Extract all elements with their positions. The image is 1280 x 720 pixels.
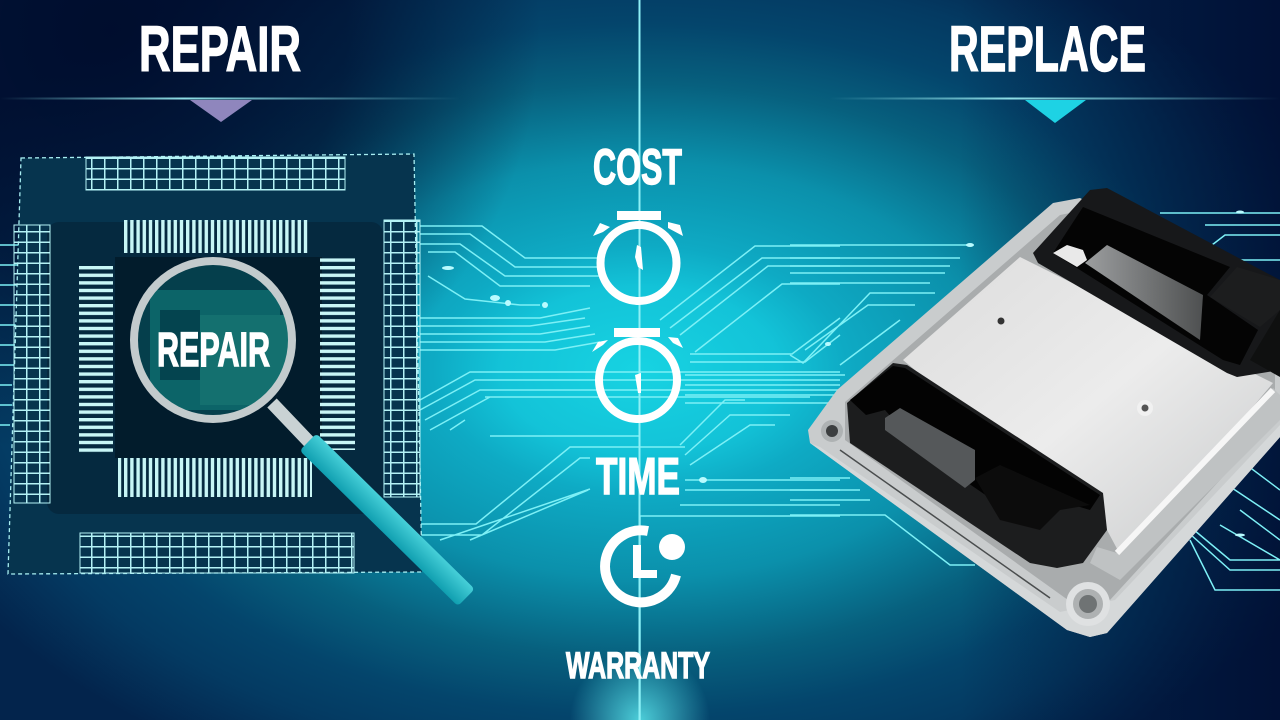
- circuit nodes: [442, 210, 1245, 536]
- connector cells: [885, 408, 975, 488]
- mesh: left: [14, 225, 50, 503]
- header: replace: [830, 13, 1280, 123]
- lower rail: [810, 425, 1280, 637]
- pins: left: [79, 263, 113, 455]
- mesh: bottom: [80, 533, 354, 573]
- lens: [138, 265, 288, 415]
- pins: bottom: [118, 458, 312, 497]
- circuit chip illustration: [8, 154, 422, 574]
- pins: top: [124, 220, 310, 253]
- marker triangle: replace: [1025, 100, 1086, 123]
- handle: blue grip: [300, 433, 475, 606]
- top plate: [903, 257, 1273, 560]
- lens label: REPAIR: [157, 324, 270, 377]
- icon: stopwatch 1: [593, 211, 683, 301]
- metal housing: [808, 198, 1280, 637]
- mounting lug: bottom: [1066, 582, 1110, 626]
- center divider line: [638, 0, 640, 720]
- heading: repair: REPAIR: [139, 13, 301, 85]
- marker triangle: repair: [190, 100, 252, 122]
- mesh: right: [384, 220, 420, 497]
- label: time: TIME: [596, 448, 680, 506]
- label: cost: COST: [593, 139, 682, 195]
- mesh: top: [86, 157, 345, 190]
- chip core: [115, 257, 322, 458]
- header: repair: [0, 13, 460, 122]
- handle: metal neck: [272, 403, 312, 445]
- dashed outline: [8, 154, 422, 574]
- icon: stopwatch 2: [592, 328, 683, 419]
- mounting lug: left: [821, 420, 843, 442]
- magnifying glass: [130, 255, 475, 606]
- right rail: [1090, 388, 1280, 580]
- ecu module illustration: [808, 188, 1280, 637]
- heading: replace: REPLACE: [949, 13, 1146, 85]
- mounting holes: [998, 318, 1004, 324]
- connector: lower: [847, 363, 1107, 568]
- icon: warranty clock: [605, 530, 685, 602]
- connector: upper: [1033, 188, 1280, 377]
- pins: right: [320, 258, 355, 450]
- circuit traces: [0, 213, 1280, 720]
- label: warranty: WARRANTY: [566, 645, 710, 686]
- chip board: [8, 154, 422, 574]
